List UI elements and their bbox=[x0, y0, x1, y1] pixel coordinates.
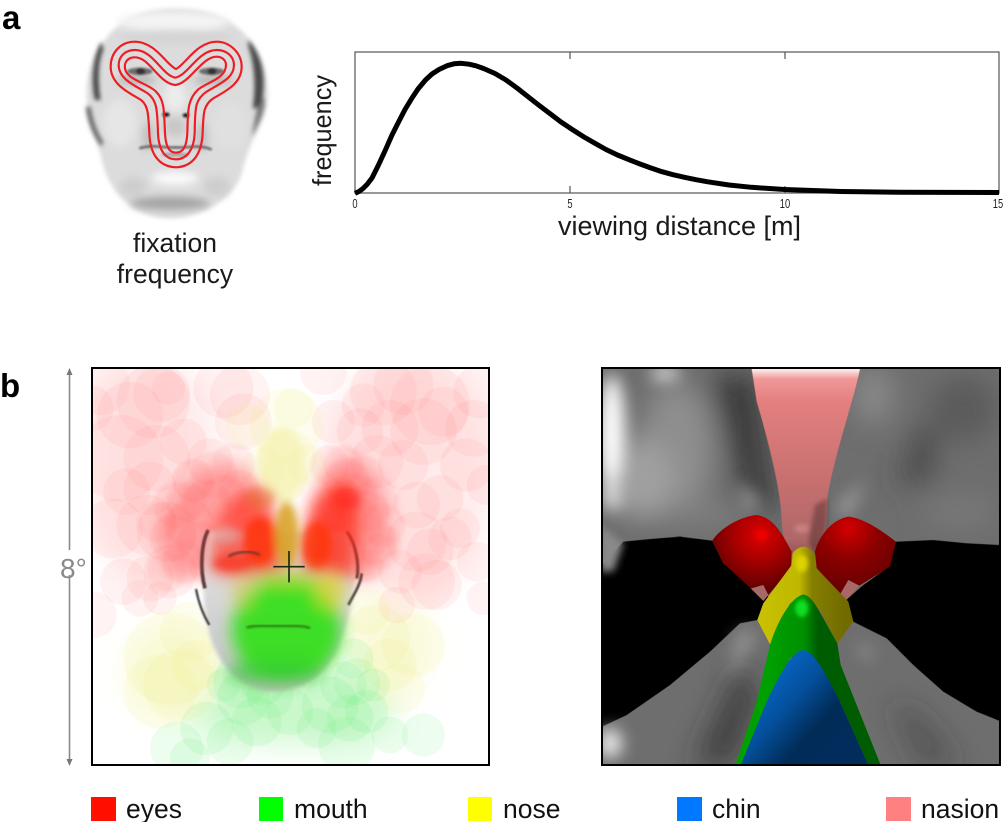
pale yellow central column bbox=[258, 427, 305, 503]
legend bbox=[91, 794, 999, 822]
mouth line bbox=[247, 626, 310, 628]
yellow nose region bbox=[757, 547, 853, 644]
heat map frame bbox=[92, 368, 489, 765]
outer red fixation circles bbox=[67, 348, 507, 638]
fixation cross bbox=[273, 551, 305, 582]
x tick labels bbox=[352, 198, 1003, 211]
chart: viewing distance frequency curve bbox=[307, 52, 1003, 241]
face caption: fixation bbox=[133, 228, 217, 258]
blue chin region bbox=[741, 650, 868, 765]
surface frame bbox=[602, 368, 1000, 765]
legend: eyes bbox=[91, 794, 182, 822]
x tick labels: 0 bbox=[352, 198, 358, 211]
panel: face with fixation frequency contours bbox=[86, 8, 268, 218]
face caption bbox=[117, 228, 234, 289]
panel label a: a bbox=[2, 0, 21, 36]
face photograph bbox=[196, 530, 362, 691]
green mouth region bbox=[735, 594, 881, 765]
eye highlight bbox=[756, 530, 768, 540]
x axis title: viewing distance [m] bbox=[558, 211, 801, 241]
yellow fixation circles bbox=[123, 388, 445, 728]
yellow highlight bbox=[796, 555, 808, 572]
legend: nasion bbox=[886, 794, 999, 822]
nasion shadow bbox=[808, 498, 827, 557]
nasion highlight bbox=[794, 524, 809, 533]
axes frame and ticks bbox=[355, 52, 999, 193]
dense red fixation cloud bbox=[137, 443, 405, 592]
green highlight bbox=[795, 600, 808, 617]
legend: chin bbox=[677, 794, 761, 822]
legend: nose bbox=[468, 794, 560, 822]
black background regions bbox=[600, 537, 1000, 728]
grey surface bbox=[600, 365, 1000, 765]
soft red wings bbox=[157, 455, 391, 578]
fixation contour lines bbox=[111, 42, 242, 167]
eye detail bbox=[228, 552, 260, 557]
scale arrow 8 degrees: 8° bbox=[60, 553, 87, 584]
red eye regions bbox=[712, 515, 792, 595]
face caption: frequency bbox=[117, 259, 234, 289]
red eye region overlay bbox=[210, 482, 359, 578]
faint colour washes bbox=[80, 348, 493, 748]
y axis title: frequency bbox=[307, 75, 337, 186]
pink nasion region bbox=[752, 369, 860, 568]
green mouth and chin overlay bbox=[223, 572, 345, 685]
x tick labels: 15 bbox=[993, 198, 1003, 211]
x tick labels: 10 bbox=[780, 198, 790, 211]
legend: mouth bbox=[259, 794, 368, 822]
distribution curve bbox=[355, 63, 999, 193]
x tick labels: 5 bbox=[567, 198, 573, 211]
lower grey surface shading bbox=[598, 632, 873, 758]
panel label b: b bbox=[0, 367, 20, 404]
panel: 3D segmented face surface bbox=[598, 365, 1000, 765]
face photograph bbox=[86, 8, 268, 218]
small pink patches bbox=[751, 585, 768, 601]
panel: fixation heat map on face bbox=[67, 348, 507, 778]
green fixation circles bbox=[150, 638, 445, 778]
left edge fade bbox=[600, 525, 623, 572]
scale arrow 8 degrees bbox=[60, 368, 87, 766]
